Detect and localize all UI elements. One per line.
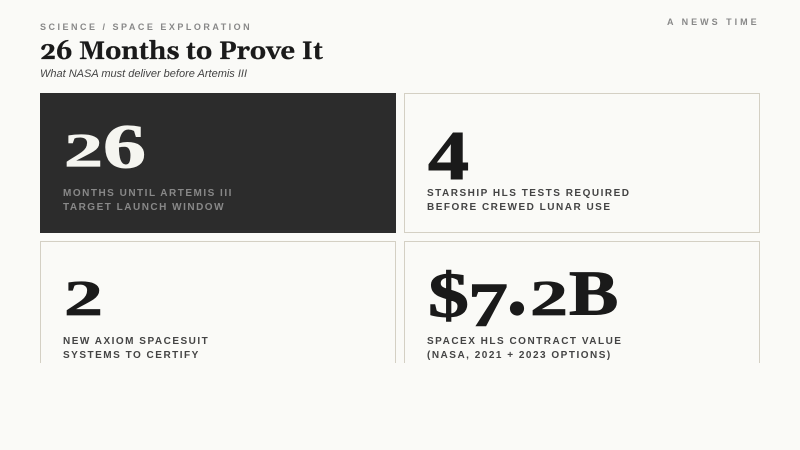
caption: months until Artemis III: TARGET LAUNCH WINDOW: [63, 202, 225, 213]
caption: Starship HLS tests: [427, 188, 630, 213]
caption: SpaceX HLS contract: SPACEX HLS CONTRACT VALUE: [427, 336, 622, 347]
panel: contract value: [404, 241, 760, 381]
caption: Starship HLS tests: BEFORE CREWED LUNAR USE: [427, 202, 612, 213]
section label: SCIENCE / SPACE EXPLORATION: [40, 22, 252, 32]
caption: Axiom spacesuit systems: SYSTEMS TO CERTIFY: [63, 350, 200, 361]
stat: 26: 2: [64, 124, 103, 177]
caption: months until Artemis III: MONTHS UNTIL ARTEMIS III: [63, 188, 233, 199]
stat: $7.2B: .: [507, 243, 527, 332]
panel: 2 spacesuits: [40, 241, 396, 381]
caption: months until Artemis III: [63, 188, 233, 213]
stat: 4: 4: [428, 117, 469, 195]
caption: SpaceX HLS contract: (NASA, 2021 + 2023 OPTIONS): [427, 350, 612, 361]
stat: $7.2B: $: [428, 260, 469, 331]
caption: Starship HLS tests: STARSHIP HLS TESTS REQUIRED: [427, 188, 630, 199]
brand: A NEWS TIME: [667, 17, 760, 27]
stat: 26: 6: [103, 111, 146, 181]
stat: $7.2B: [428, 243, 618, 339]
stat: $7.2B: B: [569, 258, 618, 329]
subtitle: What NASA must deliver before Artemis III: [40, 68, 247, 80]
caption: Axiom spacesuit systems: NEW AXIOM SPACESUIT: [63, 336, 209, 347]
title: 26 Months to Prove It: [40, 35, 323, 68]
stat: $7.2B: 2: [530, 270, 568, 326]
stat: $7.2B: 7: [468, 269, 508, 339]
panel: 4 tests: [404, 93, 760, 233]
stat: 26: [64, 111, 146, 181]
panel: 26 months: [40, 93, 396, 233]
caption: Axiom spacesuit systems: [63, 336, 209, 361]
caption: SpaceX HLS contract: [427, 336, 622, 361]
stat: 2: 2: [64, 270, 103, 326]
